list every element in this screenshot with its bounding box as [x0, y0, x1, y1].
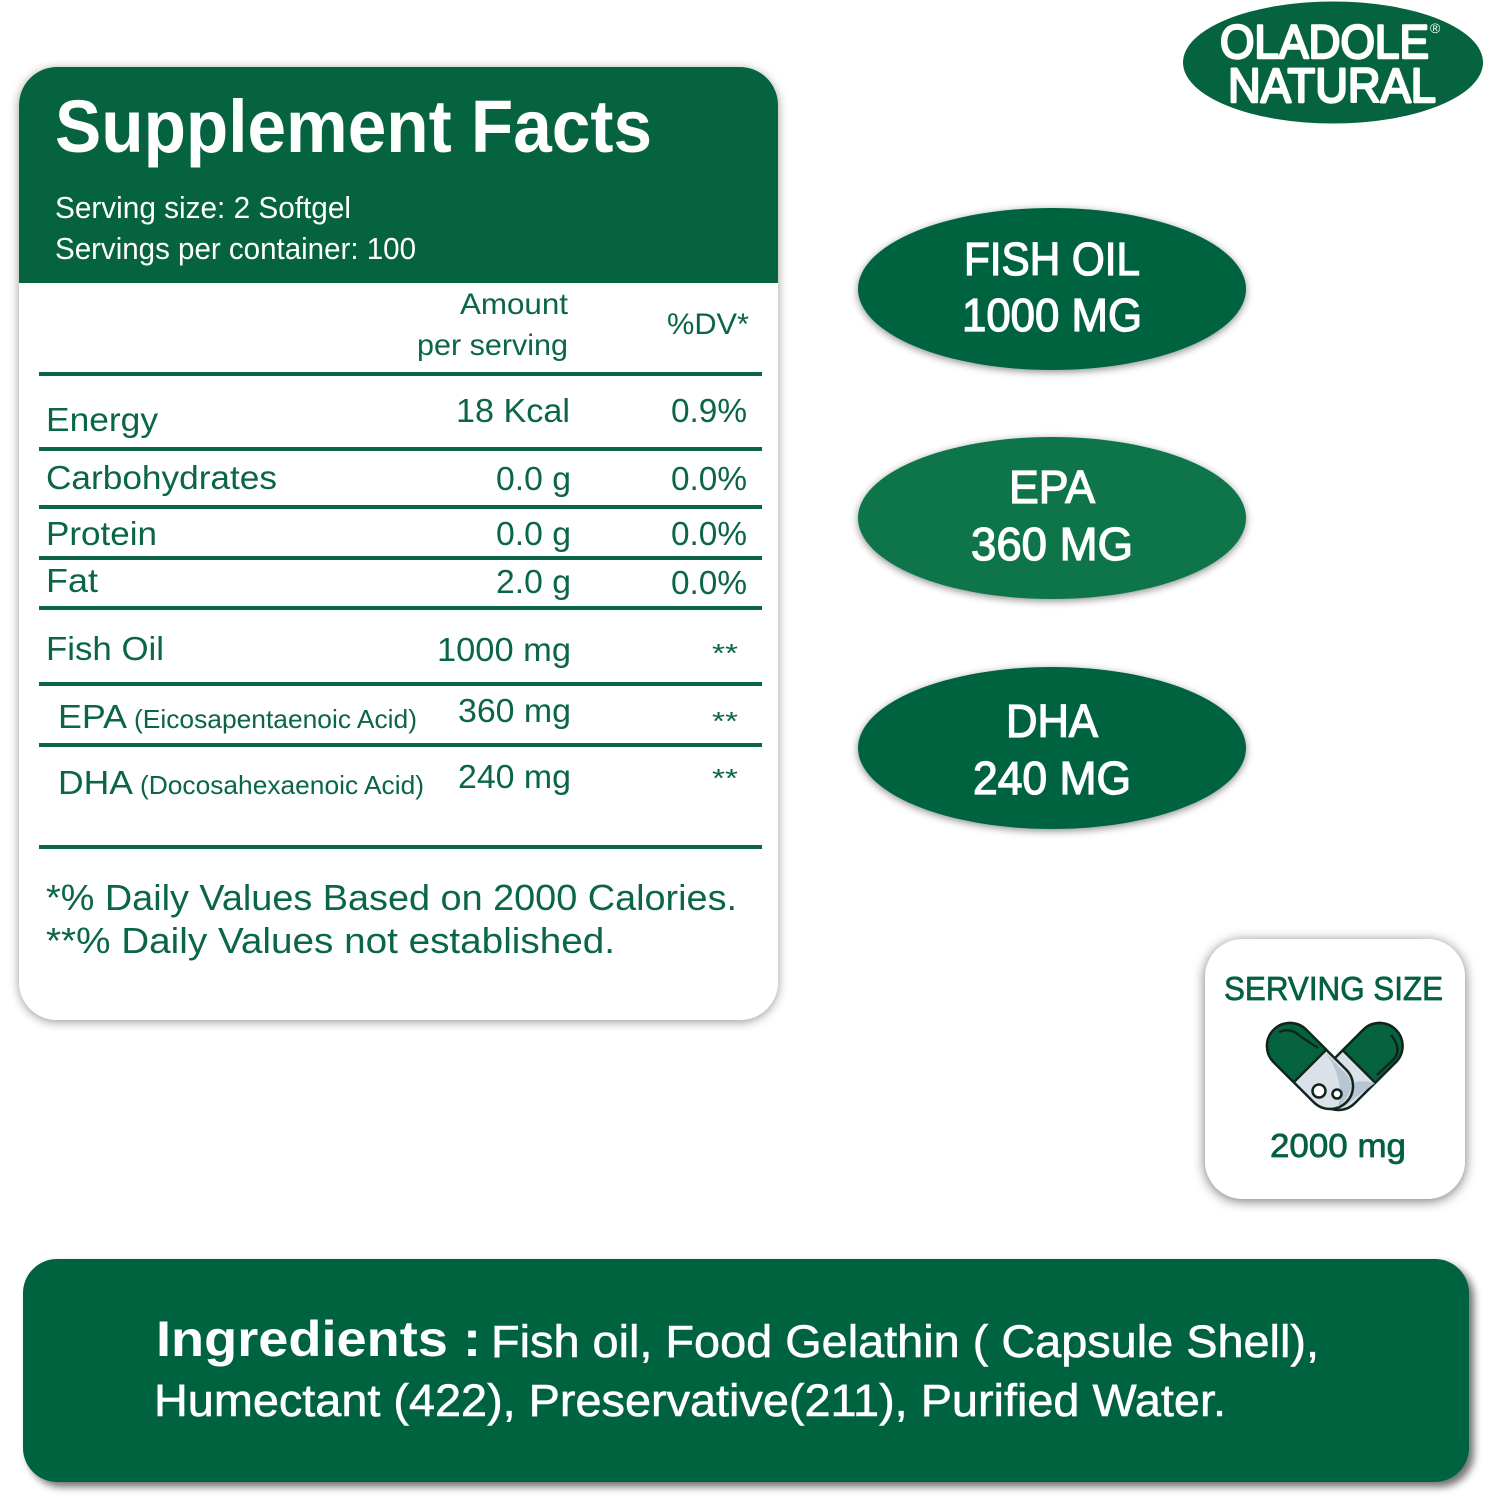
row: fish oil: **: [712, 638, 738, 668]
column headers: [417, 288, 749, 362]
row: EPA: 360 mg: [458, 692, 571, 729]
row: energy: [46, 392, 747, 438]
row: energy: Energy: [46, 401, 159, 438]
row: carbohydrates: 0.0%: [671, 460, 747, 497]
row: DHA: [58, 758, 738, 801]
badge: fish oil: [858, 208, 1246, 370]
row: DHA: 240 mg: [458, 758, 571, 795]
row: fish oil: Fish Oil: [46, 630, 164, 667]
footnotes: *% Daily Values Based on 2000 Calories.: [46, 877, 737, 918]
row: protein: Protein: [46, 515, 157, 552]
badge: fish oil: 1000 MG: [962, 289, 1142, 341]
ingredients text: [154, 1311, 1319, 1426]
serving size label: SERVING SIZE: [1224, 970, 1443, 1007]
badge: EPA: 360 MG: [971, 518, 1133, 570]
badge: DHA: DHA: [1006, 695, 1098, 747]
row: fish oil: [46, 630, 738, 668]
ingredients text: Humectant (422), Preservative(211), Purified Water.: [154, 1375, 1226, 1426]
logo: Oladole Natural: [1183, 2, 1483, 124]
row: fat: 0.0%: [671, 564, 747, 601]
icon: capsules: [1257, 1013, 1412, 1120]
badge: DHA: [858, 667, 1246, 829]
row: fish oil: 1000 mg: [437, 631, 571, 668]
table: [39, 288, 762, 961]
ingredients text: Ingredients :: [156, 1311, 481, 1367]
row: EPA: [58, 692, 738, 736]
badge: EPA: [858, 437, 1246, 599]
badge: DHA: 240 MG: [973, 752, 1131, 804]
row: protein: 0.0%: [671, 515, 747, 552]
row: carbohydrates: 0.0 g: [496, 460, 571, 497]
row: energy: 0.9%: [671, 392, 747, 429]
left capsule: [1257, 1013, 1363, 1119]
logo: Oladole Natural: NATURAL: [1228, 60, 1436, 113]
heading: Supplement Facts: [55, 85, 652, 168]
row: DHA: (Docosahexaenoic Acid): [140, 770, 424, 800]
logo: Oladole Natural: ®: [1430, 20, 1441, 36]
row: EPA: EPA: [58, 698, 127, 735]
logo: Oladole Natural: OLADOLE: [1220, 15, 1429, 68]
row: fat: 2.0 g: [496, 563, 571, 600]
row: carbohydrates: [46, 459, 747, 497]
column headers: Amount: [460, 288, 569, 321]
row: DHA: **: [712, 763, 738, 793]
row: protein: [46, 515, 747, 552]
footnotes: [46, 877, 737, 961]
bubbles: [1312, 1084, 1342, 1098]
right capsule: [1306, 1013, 1412, 1120]
row: EPA: (Eicosapentaenoic Acid): [134, 704, 417, 734]
panel: supplement facts: [19, 67, 778, 1020]
row: fat: Fat: [46, 562, 98, 599]
row: carbohydrates: Carbohydrates: [46, 459, 277, 496]
serving size text: Serving size: 2 Softgel: [55, 190, 351, 225]
column headers: %DV*: [667, 308, 749, 341]
serving amount: 2000 mg: [1270, 1127, 1406, 1164]
badge: fish oil: FISH OIL: [964, 233, 1140, 285]
column headers: per serving: [417, 329, 568, 362]
row: energy: 18 Kcal: [456, 392, 570, 429]
ingredients text: Fish oil, Food Gelathin ( Capsule Shell),: [491, 1316, 1319, 1367]
row: fat: [46, 562, 747, 601]
panel: ingredients: [23, 1259, 1469, 1482]
row dividers: [39, 372, 762, 849]
row: protein: 0.0 g: [496, 515, 571, 552]
panel: serving size: [1205, 939, 1465, 1199]
badge: EPA: EPA: [1009, 461, 1095, 513]
row: DHA: DHA: [58, 764, 133, 801]
panel header: [19, 67, 778, 283]
footnotes: **% Daily Values not established.: [46, 920, 615, 961]
panel header: Servings per container: 100: [55, 231, 416, 266]
row: EPA: **: [712, 706, 738, 736]
